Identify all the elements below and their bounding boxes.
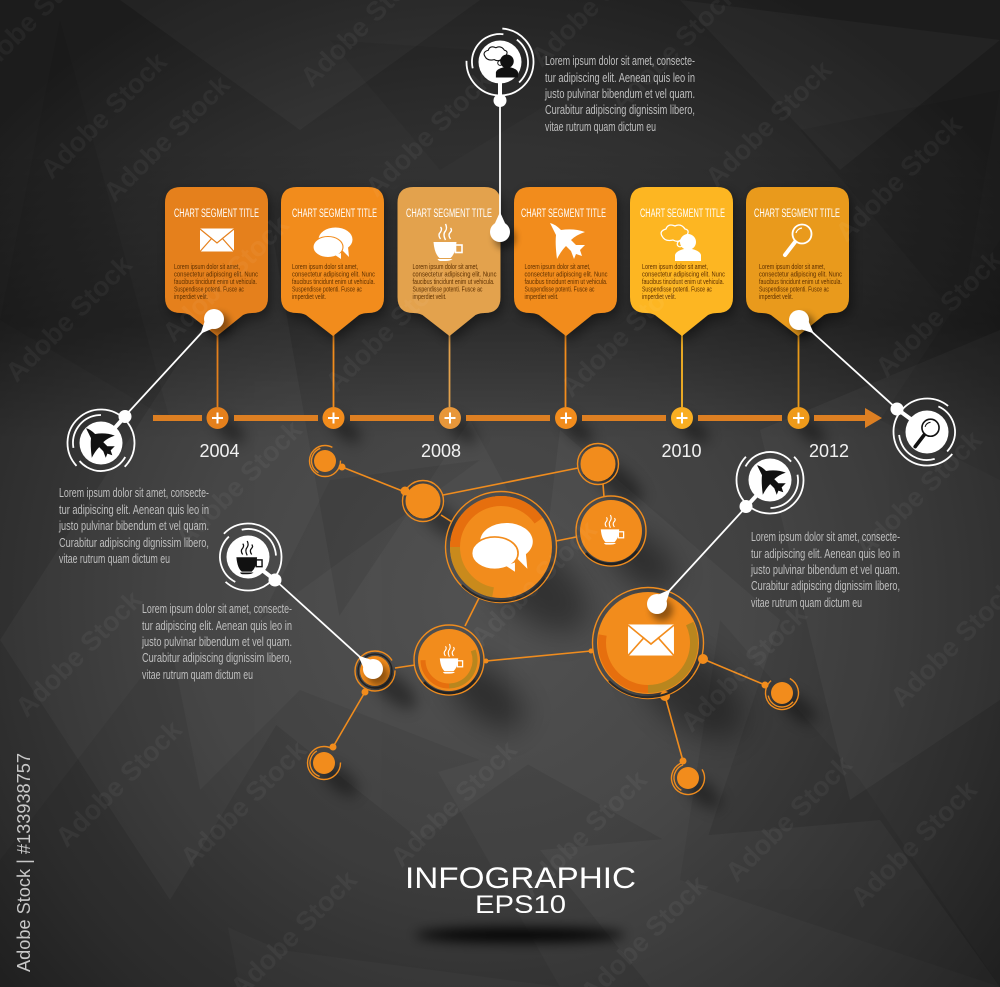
- text block: middle left: Curabitur adipiscing dignissim libero,: [142, 650, 292, 665]
- card 3: coffee: Lorem ipsum dolor sit amet,: [412, 262, 478, 271]
- card 4: plane: [514, 187, 617, 336]
- watermark: Adobe Stock: [465, 514, 603, 653]
- watermark: Adobe Stock: [10, 584, 148, 723]
- text block: right: justo pulvinar bibendum et vel quam.: [750, 562, 900, 577]
- watermark: Adobe Stock: [98, 69, 236, 208]
- card 6: magnifier: Suspendisse potenti. Fusce ac: [759, 284, 829, 294]
- text block: top: justo pulvinar bibendum et vel quam.: [544, 86, 695, 101]
- network junction dots: [330, 464, 768, 764]
- satellite node: far top left: [307, 443, 343, 479]
- text block: left: Curabitur adipiscing dignissim libero,: [59, 535, 209, 550]
- network shadows: [211, 412, 829, 815]
- card 4: plane: imperdiet velit.: [524, 292, 558, 301]
- text block: middle left: tur adipiscing elit. Aenean quis leo in: [142, 618, 292, 633]
- text block: right: vitae rutrum quam dictum eu: [751, 595, 862, 610]
- card 6: magnifier: [746, 187, 849, 336]
- card connector stems: [218, 334, 798, 407]
- card 5: thinking person: Suspendisse potenti. Fusce ac: [642, 284, 712, 294]
- card 1: mail: consectetur adipiscing elit. Nunc: [174, 270, 258, 278]
- card 6: magnifier: consectetur adipiscing elit. Nunc: [759, 270, 842, 278]
- card 2: speech: consectetur adipiscing elit. Nunc: [292, 270, 375, 278]
- card 5: thinking person: imperdiet velit.: [642, 292, 676, 301]
- watermark: Adobe Stock: [320, 259, 458, 398]
- node: small top right: [578, 444, 618, 484]
- card 3: coffee: CHART SEGMENT TITLE: [406, 208, 492, 220]
- card 2: speech: Lorem ipsum dolor sit amet,: [292, 262, 358, 271]
- watermark: Adobe Stock: [555, 264, 693, 403]
- callout: plane left: [46, 309, 224, 498]
- timeline: [153, 407, 882, 461]
- card 6: magnifier: imperdiet velit.: [759, 292, 793, 301]
- watermark: Adobe Stock: [720, 749, 858, 888]
- ground shadow under title: [415, 928, 625, 942]
- pin shadows: [208, 227, 815, 686]
- watermark: Adobe Stock: [175, 734, 313, 873]
- node: large speech circle: [446, 492, 556, 602]
- card 1: mail: imperdiet velit.: [174, 292, 208, 301]
- text block: right: tur adipiscing elit. Aenean quis leo in: [751, 546, 900, 561]
- watermark: Adobe Stock: [515, 764, 653, 903]
- network connecting lines: [333, 467, 765, 761]
- node: coffee circle bottom: [414, 625, 484, 695]
- year labels: 2008: [421, 441, 461, 461]
- text block: left: [58, 485, 209, 566]
- title: INFOGRAPHIC: [405, 862, 636, 895]
- watermark: Adobe Stock: [170, 414, 308, 553]
- card 2: speech: [281, 187, 384, 336]
- text block: top: [544, 53, 695, 134]
- text block: top: Lorem ipsum dolor sit amet, consecte-: [545, 53, 695, 68]
- network graph: [306, 443, 805, 801]
- card 5: thinking person: faucibus tincidunt enim ut vehicula.: [642, 277, 724, 286]
- card 6: magnifier: faucibus tincidunt enim ut vehicula.: [759, 277, 842, 286]
- text block: middle left: Lorem ipsum dolor sit amet, consecte-: [142, 601, 292, 616]
- text block: right: Lorem ipsum dolor sit amet, consecte-: [751, 529, 900, 544]
- text block: middle left: vitae rutrum quam dictum eu: [142, 667, 253, 682]
- callout: magnifier right: [789, 310, 982, 487]
- watermark: Adobe Stock: [830, 109, 968, 248]
- card 4: plane: CHART SEGMENT TITLE: [521, 208, 606, 220]
- card 5: thinking person: [630, 187, 733, 336]
- card 4: plane: Suspendisse potenti. Fusce ac: [524, 284, 595, 294]
- text block: left: justo pulvinar bibendum et vel quam.: [58, 518, 209, 533]
- card 6: magnifier: Lorem ipsum dolor sit amet,: [759, 262, 825, 271]
- callout: plane middle right: [647, 425, 825, 614]
- watermark: Adobe Stock: [675, 599, 813, 738]
- title: EPS10: [475, 891, 566, 919]
- card 2: speech: Suspendisse potenti. Fusce ac: [292, 284, 362, 294]
- watermark: Adobe Stock: [700, 54, 838, 193]
- watermark: Adobe Stock: [0, 249, 138, 388]
- year labels: 2010: [661, 441, 702, 461]
- card 6: magnifier: CHART SEGMENT TITLE: [754, 208, 840, 220]
- watermark: Adobe Stock: [845, 774, 983, 913]
- text block: left: tur adipiscing elit. Aenean quis leo in: [59, 502, 209, 517]
- text block: left: Lorem ipsum dolor sit amet, consecte-: [59, 485, 209, 500]
- card 3: coffee: [398, 187, 500, 336]
- callout: coffee middle left: [193, 502, 383, 679]
- watermark: Adobe Stock: [157, 209, 295, 348]
- timeline nodes: [206, 407, 810, 429]
- card 3: coffee: consectetur adipiscing elit. Nunc: [412, 270, 497, 278]
- text block: top: vitae rutrum quam dictum eu: [545, 119, 656, 134]
- card 3: coffee: Suspendisse potenti. Fusce ac: [412, 284, 483, 294]
- satellite node: bottom right: [665, 755, 711, 801]
- card 2: speech: imperdiet velit.: [292, 292, 326, 301]
- text block: left: vitae rutrum quam dictum eu: [59, 551, 170, 566]
- text block: middle left: justo pulvinar bibendum et vel quam.: [141, 634, 292, 649]
- text block: top: tur adipiscing elit. Aenean quis leo in: [545, 70, 695, 85]
- text block: middle left: [141, 601, 292, 682]
- stock id vertical text: Adobe Stock | #133938757: [14, 753, 34, 972]
- card 5: thinking person: Lorem ipsum dolor sit amet,: [642, 262, 708, 271]
- card 5: thinking person: consectetur adipiscing elit. Nunc: [642, 270, 725, 278]
- node: small left: [402, 480, 444, 522]
- watermark: Adobe Stock: [50, 714, 188, 853]
- callout: thinking person top: [461, 23, 539, 242]
- watermark: Adobe Stock: [360, 64, 498, 203]
- text block: right: Curabitur adipiscing dignissim libero,: [751, 578, 900, 593]
- node: large mail circle: [587, 582, 709, 704]
- card 1: mail: [165, 187, 268, 336]
- card 3: coffee: faucibus tincidunt enim ut vehicula.: [412, 277, 494, 286]
- node: coffee circle right: [576, 496, 646, 566]
- card 1: mail: Suspendisse potenti. Fusce ac: [174, 284, 244, 294]
- card 2: speech: CHART SEGMENT TITLE: [292, 208, 377, 220]
- card 1: mail: Lorem ipsum dolor sit amet,: [174, 262, 240, 271]
- text block: right: [750, 529, 900, 610]
- year labels: 2004: [199, 441, 240, 461]
- satellite node: right: [759, 670, 805, 716]
- title: [405, 862, 636, 919]
- year labels: 2012: [809, 441, 849, 461]
- card 3: coffee: imperdiet velit.: [412, 292, 446, 301]
- watermark: Adobe Stock: [850, 424, 988, 563]
- card 2: speech: faucibus tincidunt enim ut vehicula.: [292, 277, 375, 286]
- card 4: plane: faucibus tincidunt enim ut vehicula.: [524, 277, 608, 286]
- card 4: plane: consectetur adipiscing elit. Nunc: [524, 270, 608, 278]
- text block: top: Curabitur adipiscing dignissim libero,: [545, 102, 695, 117]
- node: small with pin: [355, 651, 395, 691]
- card 1: mail: faucibus tincidunt enim ut vehicula.: [174, 277, 257, 286]
- watermark: Adobe Stock: [35, 46, 173, 185]
- card 4: plane: Lorem ipsum dolor sit amet,: [524, 262, 590, 271]
- timeline arrow: [153, 408, 882, 428]
- satellite node: bottom left: [306, 745, 342, 781]
- watermark: Adobe Stock: [385, 734, 523, 873]
- card 1: mail: CHART SEGMENT TITLE: [174, 208, 259, 220]
- year labels: [199, 441, 849, 461]
- card 5: thinking person: CHART SEGMENT TITLE: [640, 208, 725, 220]
